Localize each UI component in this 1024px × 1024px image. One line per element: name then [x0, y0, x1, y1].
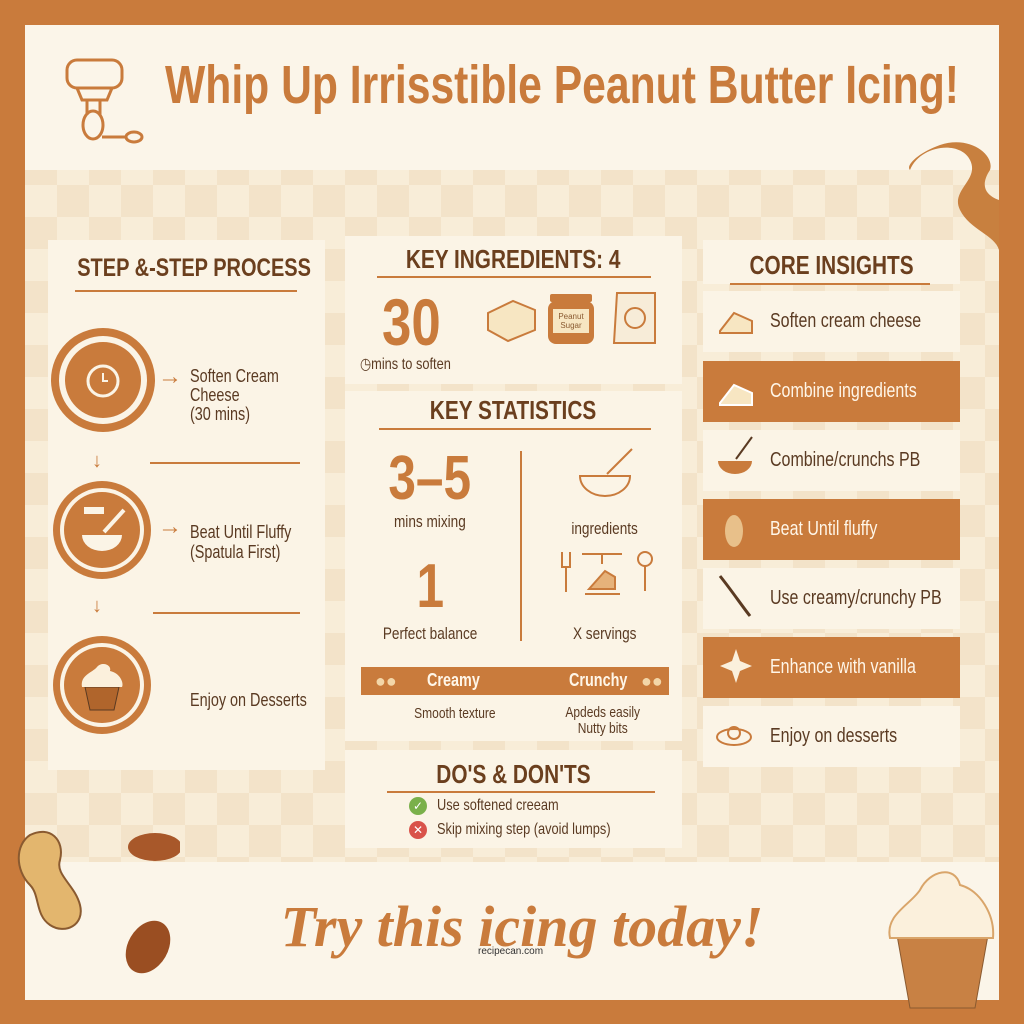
- footer text: Try this icing today!: [281, 894, 763, 959]
- bar: creamy vs crunchy: ●●: [375, 671, 397, 691]
- step 2: [53, 481, 292, 579]
- insight 6: Enhance with vanilla: [770, 656, 916, 678]
- insight 3: [703, 430, 960, 491]
- icon: hand mixer: [66, 58, 144, 144]
- arrow: →: [158, 363, 182, 390]
- text: step 2: (Spatula First): [190, 542, 280, 562]
- stat: 30 mins: 30: [382, 285, 441, 359]
- item: dont: ✕: [413, 823, 423, 837]
- step 1: [51, 328, 279, 432]
- text: step 2: [190, 522, 292, 562]
- insight 5: Use creamy/crunchy PB: [770, 587, 942, 609]
- insight 1: Soften cream cheese: [770, 310, 921, 332]
- panel: step-by-step process: [48, 240, 325, 770]
- insight 7: Enjoy on desserts: [770, 725, 897, 747]
- insight 2: [703, 361, 960, 422]
- watermark: recipecan.com: [478, 946, 543, 957]
- icon: peanut butter jar: Sugar: [560, 321, 582, 330]
- text: step 1: [190, 366, 279, 424]
- decoration: peanut butter swirl: [909, 142, 999, 250]
- icon: bowl circle: [53, 481, 151, 579]
- icon: flour bag: [612, 292, 656, 344]
- insight 6: [703, 637, 960, 698]
- heading: CORE INSIGHTS: [749, 250, 914, 280]
- stat: 3-5 mins mixing: 3–5: [389, 444, 471, 513]
- stat: 1 perfect balance: 1: [416, 552, 444, 621]
- item: do: ✓: [413, 799, 423, 813]
- icon: cake and utensils: [561, 551, 653, 595]
- stat: 30 mins: ◷mins to soften: [360, 356, 451, 373]
- icon: whisk bowl: [579, 448, 633, 497]
- arrow down: ↓: [92, 595, 102, 617]
- text: creamy detail: Smooth texture: [414, 705, 496, 722]
- panel: key statistics: [345, 391, 682, 741]
- insight icons: [716, 312, 753, 746]
- header band: [25, 25, 999, 170]
- bar: creamy vs crunchy: [361, 667, 669, 695]
- heading: KEY INGREDIENTS: 4: [406, 244, 621, 274]
- bar: creamy vs crunchy: Creamy: [427, 670, 480, 690]
- text: crunchy detail: [565, 704, 640, 737]
- item: do: Use softened creeam: [437, 797, 559, 814]
- icon: cupcake circle: [53, 636, 151, 734]
- icon: peanut butter jar: Peanut: [558, 312, 584, 321]
- arrow down: ↓: [92, 450, 102, 472]
- decoration: peanuts: [18, 830, 180, 974]
- insight 1: [703, 291, 960, 352]
- decoration: cupcake: [888, 871, 994, 1008]
- text: crunchy detail: Nutty bits: [578, 720, 628, 737]
- text: step 1: Soften Cream: [190, 366, 279, 386]
- bar: creamy vs crunchy: ●●: [641, 671, 663, 691]
- heading: [703, 240, 960, 284]
- panel: key statistics: X servings: [573, 624, 637, 643]
- step 2: →: [158, 513, 182, 540]
- insight 4: [703, 499, 960, 560]
- panel: dos and donts: [345, 750, 682, 848]
- heading: DO'S & DON'TS: [436, 759, 591, 789]
- insight 7: [703, 706, 960, 767]
- heading: KEY STATISTICS: [430, 395, 597, 425]
- panel: key statistics: ingredients: [572, 519, 638, 538]
- bar: creamy vs crunchy: Crunchy: [569, 670, 627, 690]
- insight 5: [703, 568, 960, 629]
- icon: peanut butter jar: [548, 294, 594, 344]
- icon: cheese: [487, 300, 536, 342]
- stat: 1 perfect balance: [383, 552, 477, 643]
- insight 2: Combine ingredients: [770, 380, 917, 402]
- text: step 1: Cheese: [190, 385, 240, 405]
- text: step 2: Beat Until Fluffy: [190, 522, 291, 542]
- panel: key ingredients: [345, 236, 682, 384]
- insight 3: Combine/crunchs PB: [770, 449, 920, 471]
- stat: 1 perfect balance: Perfect balance: [383, 624, 477, 643]
- text: crunchy detail: Apdeds easily: [566, 704, 640, 721]
- text: step 3: Enjoy on Desserts: [190, 690, 307, 710]
- text: step 1: (30 mins): [190, 404, 250, 424]
- heading: step process: STEP &-STEP PROCESS: [77, 254, 311, 282]
- stat: 3-5 mins mixing: mins mixing: [394, 512, 466, 531]
- step 3: [53, 636, 307, 734]
- insight 4: Beat Until fluffy: [770, 518, 877, 540]
- item: dont: Skip mixing step (avoid lumps): [437, 821, 611, 838]
- footer band: [25, 862, 999, 1000]
- title: Whip Up Irrisstible Peanut Butter Icing!: [165, 55, 959, 115]
- icon: timer circle: [51, 328, 155, 432]
- stat: 30 mins: [360, 285, 451, 373]
